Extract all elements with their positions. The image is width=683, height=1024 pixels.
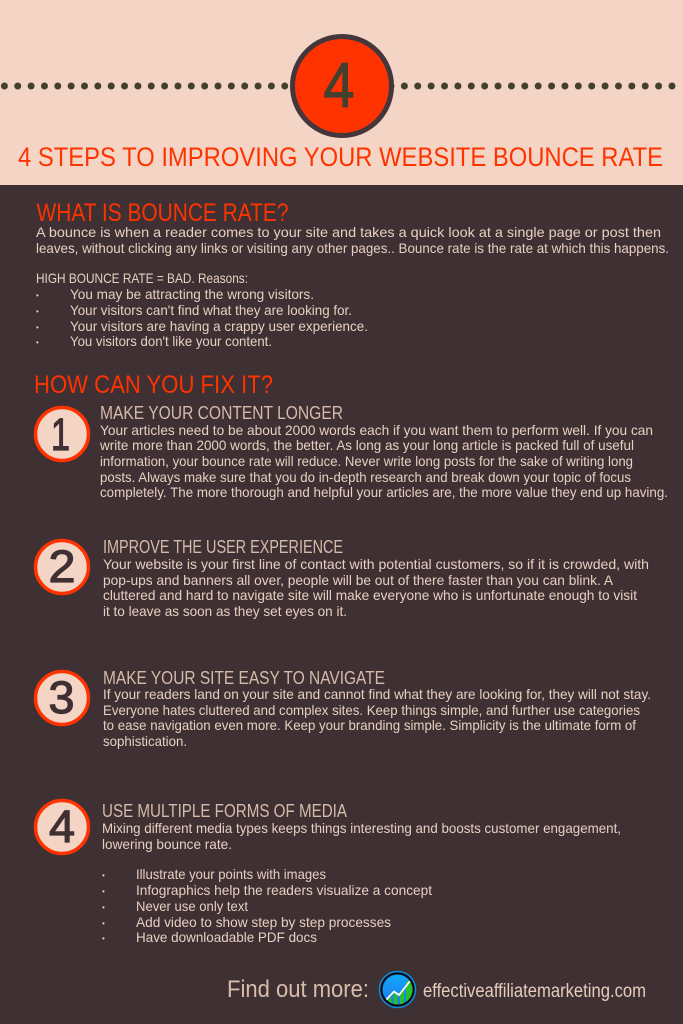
step 2 heading: IMPROVE THE USER EXPERIENCE — [103, 537, 343, 557]
step 1 text — [99, 422, 668, 500]
heading: how can you fix it: HOW CAN YOU FIX IT? — [34, 371, 273, 399]
step 4 bullet list: • — [102, 871, 105, 880]
step 4 bullet list: • — [102, 887, 105, 896]
text block: high bounce rate reasons: • — [36, 291, 39, 300]
step 4 text: lowering bounce rate. — [102, 836, 232, 852]
text block: high bounce rate reasons: • — [36, 307, 39, 316]
text block: high bounce rate reasons: Your visitors can't find what they are looking for. — [70, 302, 352, 318]
step 2 text — [103, 556, 649, 619]
step 1 text: information, your bounce rate will reduce. Never write long posts for the sake of writing long — [100, 453, 633, 469]
text block: bounce definition — [36, 224, 669, 256]
text block: high bounce rate reasons: HIGH BOUNCE RATE = BAD. Reasons: — [36, 270, 248, 286]
step 2 text: pop-ups and banners all over, people will be out of there faster than you can blink. A — [103, 572, 614, 588]
website url: effectiveaffiliatemarketing.com — [423, 981, 646, 1002]
panel: step 2 — [36, 537, 649, 619]
panel: header — [0, 0, 683, 185]
icon: number 4 badge: 4 — [324, 51, 354, 121]
step 2 text: it to leave as soon as they set eyes on it. — [103, 603, 347, 619]
text block: high bounce rate reasons: • — [36, 323, 39, 332]
panel: step 4 — [36, 800, 621, 945]
step 4 bullet list: • — [102, 919, 105, 928]
panel: step 1 — [36, 403, 668, 500]
text block: high bounce rate reasons: You visitors don't like your content. — [70, 333, 272, 349]
icon: number 4 badge — [292, 36, 392, 136]
step 3 text — [103, 686, 651, 749]
icon: number 2 — [36, 540, 88, 594]
icon: number 4 — [36, 800, 88, 854]
step 4 text: Mixing different media types keeps things interesting and boosts customer engagement, — [102, 820, 621, 836]
step 1 text: posts. Always make sure that you do in-depth research and break down your topic of focus — [100, 469, 631, 485]
step 4 bullet list — [102, 866, 432, 945]
step 1 text: write more than 2000 words, the better. As long as your long article is packed full of useful — [99, 437, 634, 453]
text block: high bounce rate reasons: Your visitors are having a crappy user experience. — [70, 318, 368, 334]
step 4 bullet list: Have downloadable PDF docs — [136, 929, 317, 945]
step 3 text: Everyone hates cluttered and complex sites. Keep things simple, and further use categories — [103, 702, 640, 718]
step 3 text: If your readers land on your site and cannot find what they are looking for, they will not stay. — [103, 686, 651, 702]
step 4 bullet list: Add video to show step by step processes — [136, 914, 391, 930]
icon: number 1 — [36, 408, 88, 460]
panel: step 3 — [36, 668, 651, 749]
icon: number 3: 3 — [48, 672, 74, 723]
find out more text: Find out more: — [227, 976, 369, 1003]
step 2 text: Your website is your first line of contact with potential customers, so if it is crowded, with — [103, 556, 649, 572]
step 1 text: completely. The more thorough and helpful your articles are, the more value they end up having. — [100, 484, 668, 500]
icon: number 4: 4 — [49, 801, 75, 852]
heading: what is bounce rate: WHAT IS BOUNCE RATE? — [36, 199, 288, 227]
icon: logo with rising chart — [380, 972, 416, 1008]
text block: bounce definition: leaves, without clicking any links or visiting any other pages.. Bounce rate is the rate at which this happens. — [36, 240, 669, 256]
step 4 bullet list: Illustrate your points with images — [136, 866, 326, 882]
icon: number 2: 2 — [48, 541, 76, 592]
icon: number 1: 1 — [51, 409, 70, 460]
step 4 bullet list: Never use only text — [136, 898, 248, 914]
icon: number 3 — [36, 672, 88, 724]
panel: footer — [227, 972, 646, 1008]
step 3 heading: MAKE YOUR SITE EASY TO NAVIGATE — [103, 668, 385, 688]
step 4 text — [102, 820, 621, 852]
step 4 heading: USE MULTIPLE FORMS OF MEDIA — [102, 801, 347, 821]
text block: bounce definition: A bounce is when a reader comes to your site and takes a quick look at a single page or post then — [36, 224, 661, 240]
step 4 bullet list: Infographics help the readers visualize a concept — [136, 882, 432, 898]
text block: high bounce rate reasons — [36, 270, 368, 349]
step 4 bullet list: • — [102, 903, 105, 912]
step 3 text: sophistication. — [103, 733, 187, 749]
step 1 text: Your articles need to be about 2000 words each if you want them to perform well. If you can — [100, 422, 653, 438]
step 1 heading: MAKE YOUR CONTENT LONGER — [100, 403, 343, 423]
text block: high bounce rate reasons: • — [36, 338, 39, 347]
step 2 text: cluttered and hard to navigate site will make everyone who is unfortunate enough to visit — [103, 587, 637, 603]
step 3 text: to ease navigation even more. Keep your branding simple. Simplicity is the ultimate form of — [103, 717, 636, 733]
step 4 bullet list: • — [102, 934, 105, 943]
text block: high bounce rate reasons: You may be attracting the wrong visitors. — [70, 286, 314, 302]
